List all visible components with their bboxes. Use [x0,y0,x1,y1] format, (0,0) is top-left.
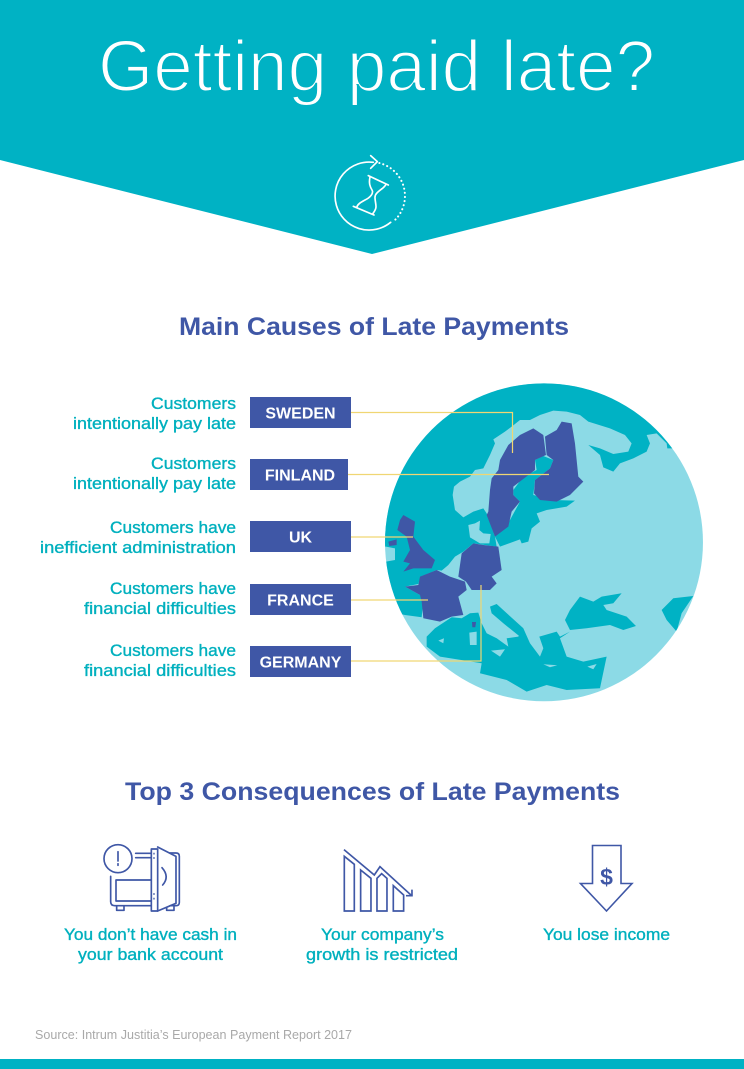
caption: growth restricted: Your company’s [321,926,444,944]
row: UK: Customers have [110,519,236,537]
row: Sweden: Customers [151,395,236,413]
row: Sweden [73,395,351,433]
row: UK: UK [289,530,312,546]
row: Sweden: intentionally pay late [73,415,236,433]
Atlantic and Arctic ocean [385,383,672,618]
caption: no cash: your bank account [78,946,223,964]
caption: growth restricted: growth is restricted [306,946,458,964]
footer bar [0,1059,744,1069]
row: Germany: Customers have [110,642,236,660]
icon: down arrow with dollar: $ [600,864,613,890]
row: Germany: financial difficulties [84,662,236,680]
row: France: financial difficulties [84,600,236,618]
row: Germany [84,642,351,680]
globe map of Europe [373,373,713,701]
row: France: FRANCE [267,592,334,610]
caption: no cash: You don’t have cash in [64,926,237,944]
icon: open safe with alert [104,845,179,911]
Finland [534,422,583,502]
caption: lose income: You lose income [543,926,670,944]
row: Finland: intentionally pay late [73,475,236,493]
icon: hourglass with circular arrow [335,156,405,230]
Sweden [487,428,546,537]
heading: consequences: Top 3 Consequences of Late Payments [125,778,620,806]
Adriatic sea [490,604,523,637]
row: UK [40,519,351,557]
icon: down arrow with dollar [580,846,632,911]
header banner [0,0,744,254]
row: UK: inefficient administration [40,539,236,557]
Denmark [468,521,491,543]
icon: declining bars [344,850,412,911]
heading: main causes: Main Causes of Late Payments [179,313,569,341]
Caspian sea [662,596,693,632]
row: Finland: Customers [151,455,236,473]
row: Sweden: SWEDEN [265,406,336,422]
caption: growth restricted [306,926,458,964]
Black sea [565,593,636,630]
caption: no cash [64,926,237,964]
United Kingdom [388,515,435,572]
Germany [458,543,502,590]
row: Germany: GERMANY [260,654,342,672]
row: Finland [73,455,348,493]
Estonian islands [541,513,548,524]
Mediterranean sea [427,613,607,692]
connector lines [348,412,549,661]
Mediterranean islands [438,632,597,669]
title: Getting paid late? [98,27,655,107]
Baltic sea [495,456,575,547]
row: France: Customers have [110,580,236,598]
France [405,570,476,627]
source note: Source: Intrum Justitia’s European Payment Report 2017 [35,1027,352,1042]
row: France [84,580,351,618]
row: Finland: FINLAND [265,468,335,484]
